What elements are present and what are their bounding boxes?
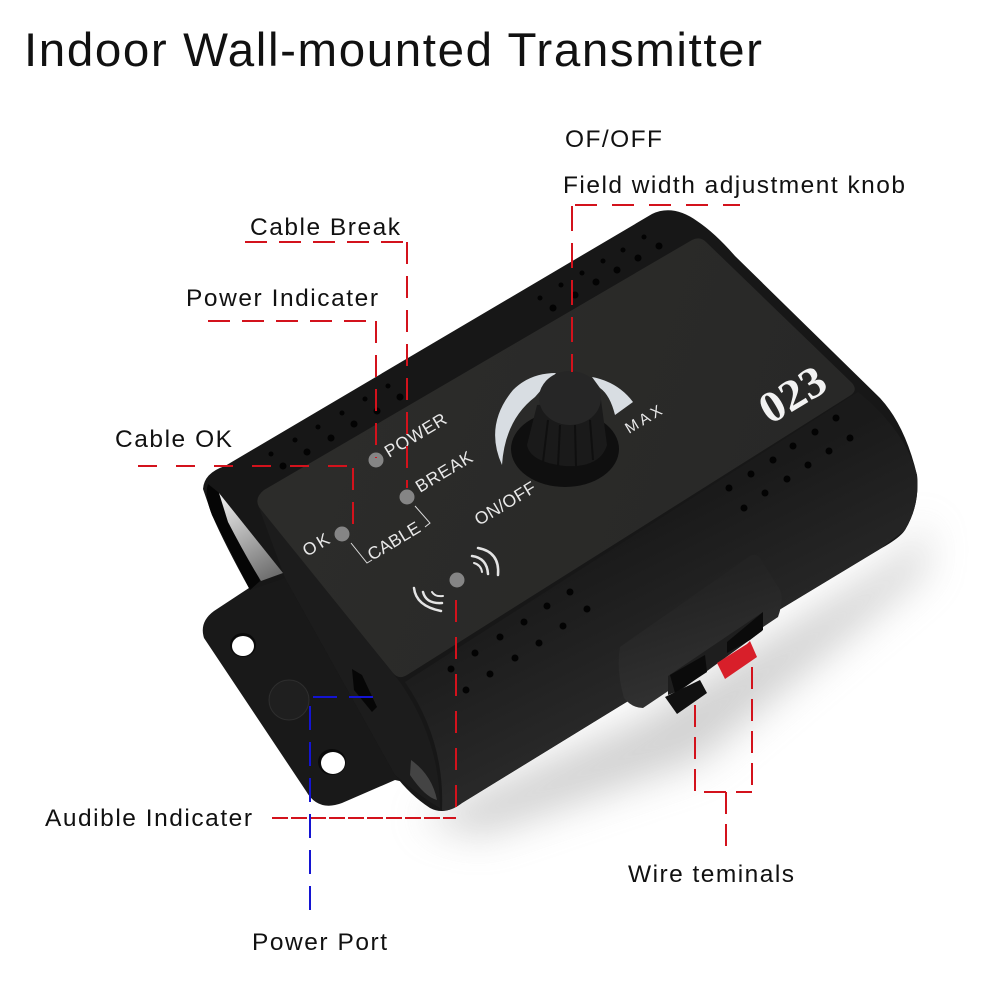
callout: field width adjustment knob: Field width adjustment knob <box>563 172 905 199</box>
cable bracket lines <box>351 506 430 563</box>
mounting bracket <box>203 560 440 806</box>
field width knob <box>495 371 633 487</box>
red lever <box>717 641 757 679</box>
callout: power indicater <box>186 285 378 458</box>
callout: cable OK: Cable OK <box>115 426 233 453</box>
knob cap <box>539 371 601 425</box>
callout: wire terminals: Wire teminals <box>628 861 794 888</box>
panel printed labels: POWER <box>381 409 450 461</box>
callout: cable break <box>245 214 408 488</box>
panel printed labels: OK <box>299 529 333 560</box>
callout: wire terminals <box>628 667 794 888</box>
clip face <box>668 612 763 695</box>
panel printed labels: MAX <box>622 402 666 437</box>
model number 023: 023 <box>750 356 835 434</box>
panel indicator lights <box>334 452 464 588</box>
callout: power port: Power Port <box>252 929 387 956</box>
control panel <box>257 234 855 694</box>
left socket <box>670 655 707 693</box>
product: transmitter device <box>203 210 925 835</box>
callout: audible indicater: Audible Indicater <box>45 805 252 832</box>
black lever <box>665 680 707 714</box>
panel printed labels <box>299 402 666 564</box>
power port slot <box>352 669 377 712</box>
soft drop shadow <box>420 520 925 835</box>
callout: power port <box>252 697 387 956</box>
callout: power indicater: Power Indicater <box>186 285 378 312</box>
panel printed labels: ON/OFF <box>471 477 539 529</box>
knob base <box>511 411 619 487</box>
right tube end detail <box>410 760 437 800</box>
callout: OF/OFF: OF/OFF <box>565 126 662 153</box>
icon: sound waves <box>414 548 498 611</box>
main housing <box>203 210 918 811</box>
end bevel <box>258 505 440 808</box>
left tube opening <box>207 484 283 590</box>
dial arc <box>495 373 556 465</box>
title: Indoor Wall-mounted Transmitter <box>24 24 762 77</box>
panel printed labels: CABLE <box>364 517 424 564</box>
callout: cable break: Cable Break <box>250 214 401 241</box>
panel printed labels: BREAK <box>412 447 476 496</box>
lower face shading <box>405 392 918 810</box>
bracket holes <box>230 633 256 657</box>
right socket <box>727 612 763 653</box>
ventilation holes <box>268 234 854 694</box>
knob body <box>527 400 607 466</box>
wire clip <box>619 555 782 714</box>
